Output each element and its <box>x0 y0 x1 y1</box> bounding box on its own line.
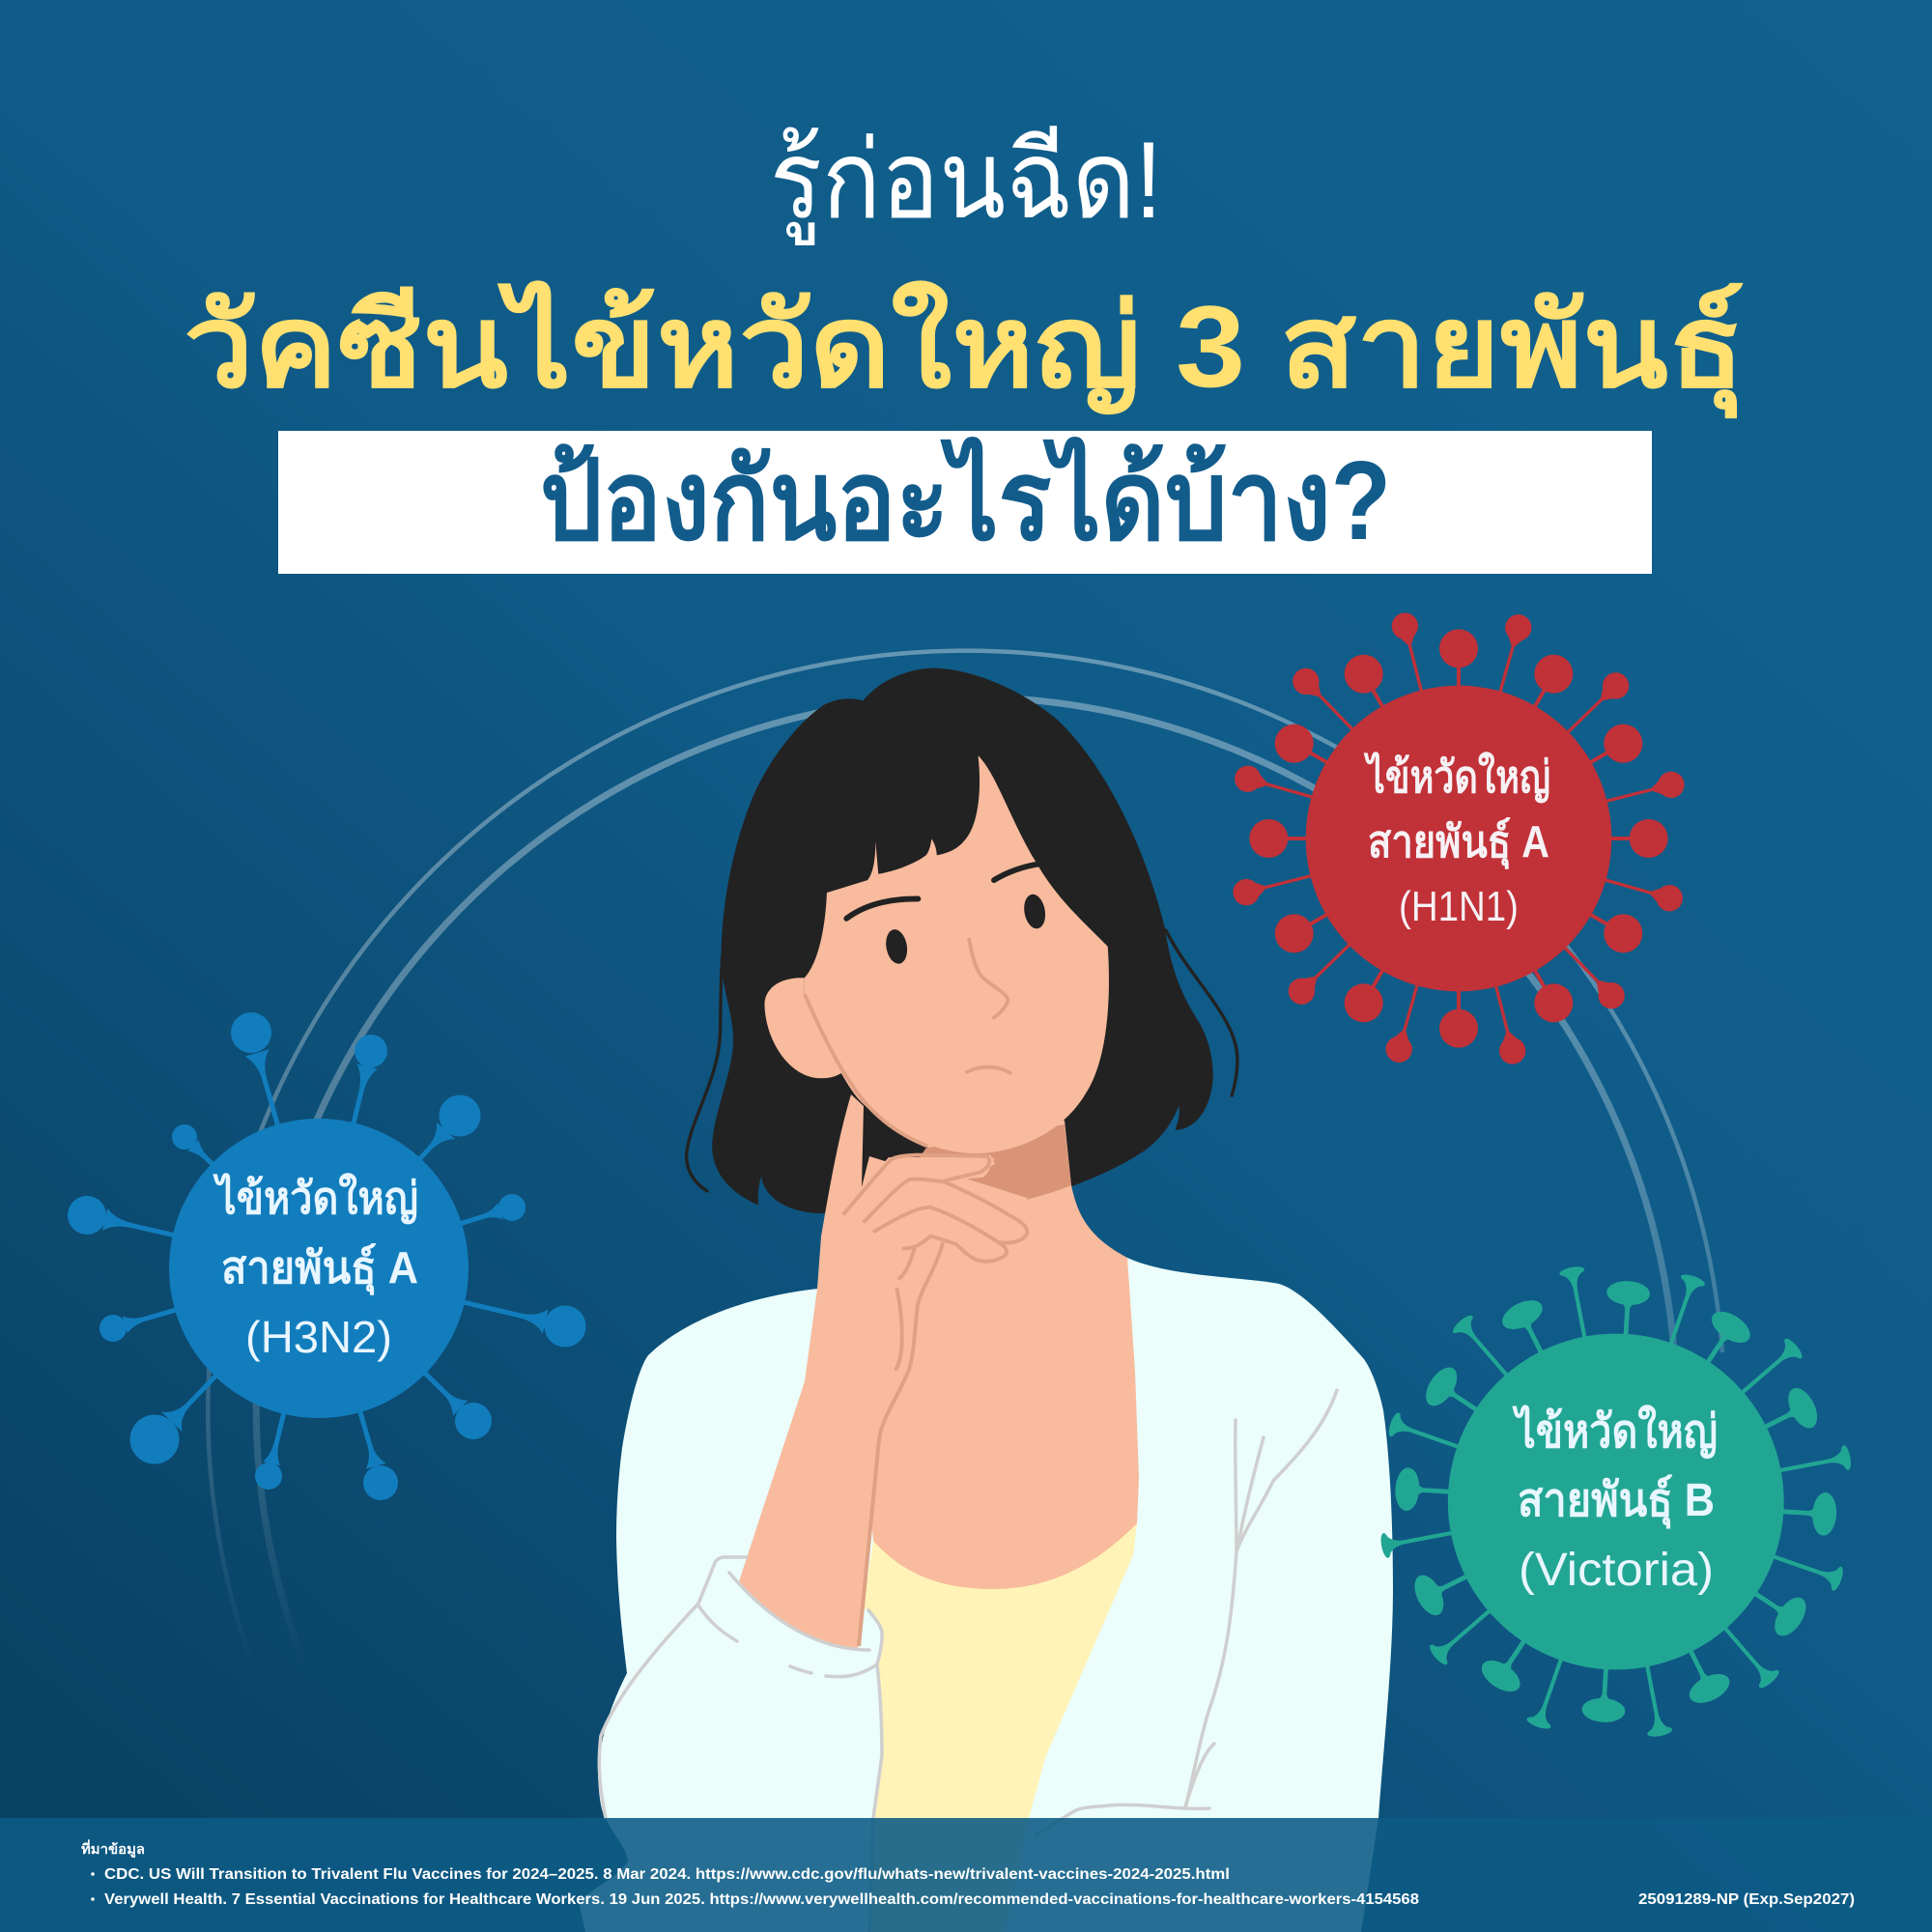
face <box>764 755 1109 1153</box>
subtitle banner: ป้องกันอะไรได้บ้าง? <box>540 437 1391 563</box>
label: H3N2 <box>213 1172 418 1362</box>
title line 2: วัคซีนไข้หวัดใหญ่ 3 สายพันธุ์ <box>184 280 1745 419</box>
footer: source list: Verywell Health. 7 Essential Vaccinations for Healthcare Workers. 19 Jun 2025. https://www.verywellhealth.com/recommended-vaccinations-for-healthcare-workers-4154568 <box>104 1891 1419 1908</box>
label: H3N2: สายพันธุ์ A <box>221 1242 418 1295</box>
ear <box>764 978 841 1078</box>
label: H1N1: สายพันธุ์ A <box>1368 816 1549 869</box>
footer: source list: CDC. US Will Transition to Trivalent Flu Vaccines for 2024–2025. 8 Mar 2024. https://www.cdc.gov/flu/whats-new/trivalent-vaccines-2024-2025.html <box>104 1866 1230 1883</box>
label: H1N1: (H1N1) <box>1399 883 1519 930</box>
nose, mouth, jaw <box>806 940 1010 1146</box>
hair <box>687 668 1237 1213</box>
footer: source list <box>91 1866 1419 1908</box>
label: H1N1 <box>1363 751 1550 930</box>
label: H3N2: ไข้หวัดใหญ่ <box>213 1172 418 1224</box>
label: H3N2: (H3N2) <box>245 1312 392 1362</box>
neck shadow <box>919 1124 1071 1207</box>
subtitle banner <box>278 431 1652 574</box>
jacket <box>580 1256 1393 1932</box>
footer: sources heading: ที่มาข้อมูล <box>81 1839 145 1858</box>
virus: Victoria (teal) <box>1379 1264 1853 1739</box>
eyes <box>884 893 1048 965</box>
neck and chest <box>850 1121 1139 1589</box>
arcs behind figure <box>208 651 1722 1662</box>
hand lines <box>844 1155 1027 1372</box>
arm and hand <box>739 1094 1027 1648</box>
virus: H3N2 (blue) <box>68 1012 585 1500</box>
tank top <box>863 1523 1137 1932</box>
label: Victoria: สายพันธุ์ B <box>1518 1474 1715 1529</box>
label: Victoria: (Victoria) <box>1519 1545 1714 1596</box>
footer panel <box>0 1818 1932 1932</box>
jacket fold lines <box>599 1390 1337 1932</box>
label: H1N1: ไข้หวัดใหญ่ <box>1363 751 1550 803</box>
label: Victoria <box>1512 1404 1718 1596</box>
footer: document code: 25091289-NP (Exp.Sep2027) <box>1638 1891 1855 1908</box>
eyebrows <box>846 864 1040 919</box>
illustration: thinking woman <box>580 668 1393 1932</box>
title line 1: รู้ก่อนฉีด! <box>770 120 1162 245</box>
virus: H1N1 (red) <box>1230 610 1688 1067</box>
label: Victoria: ไข้หวัดใหญ่ <box>1512 1404 1718 1459</box>
